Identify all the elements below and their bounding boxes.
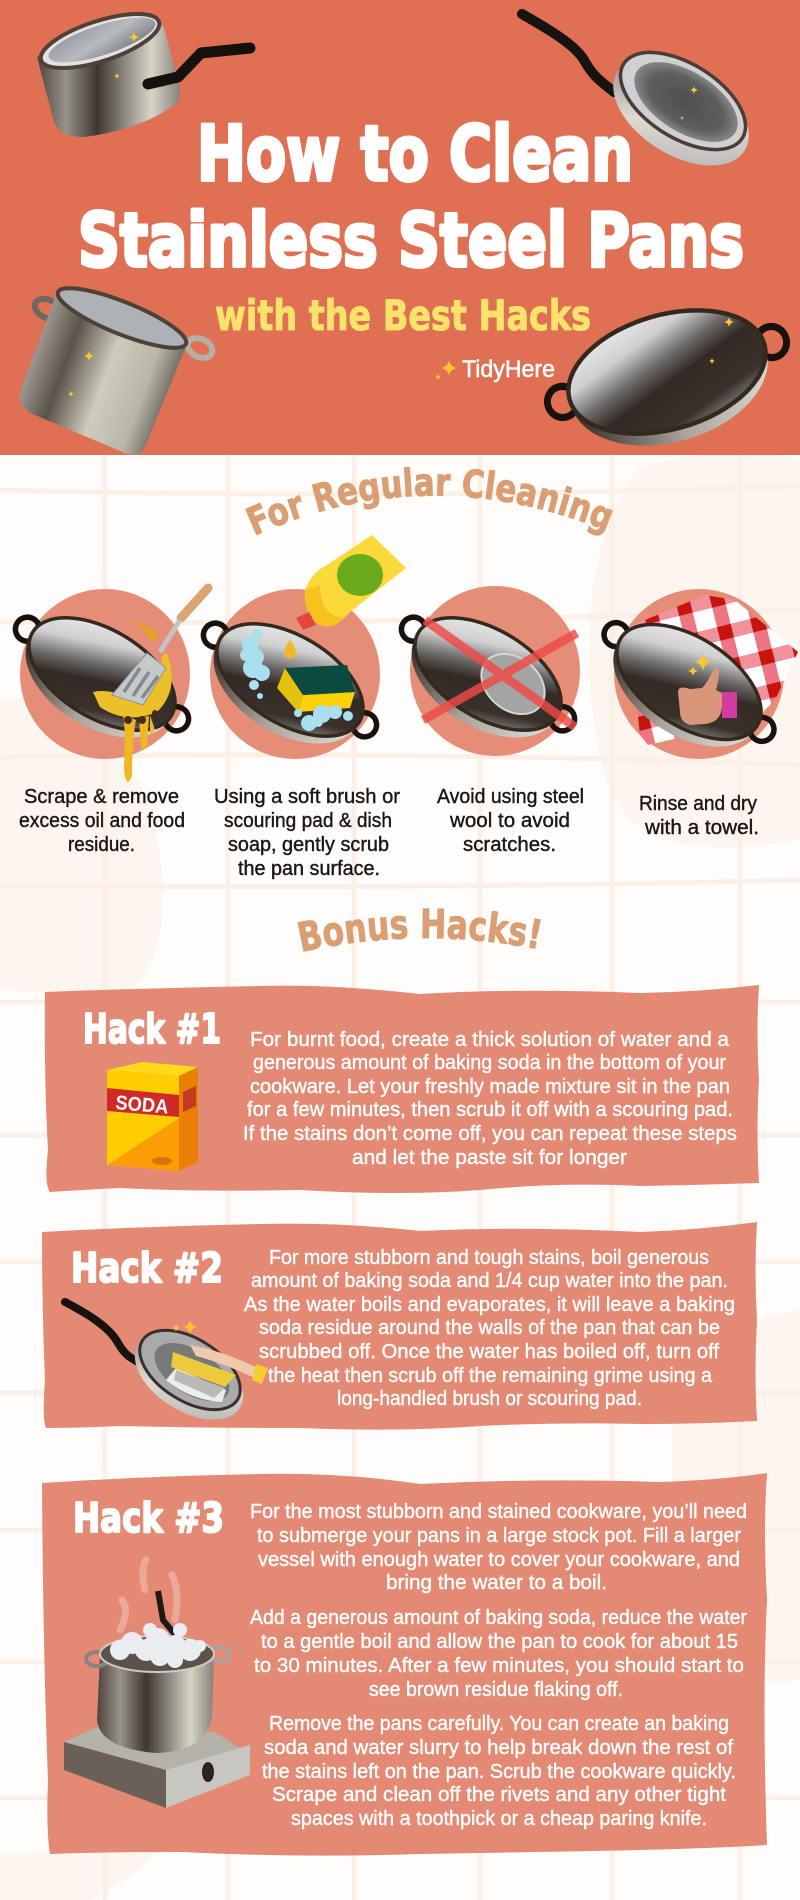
hack 3 text: the stains left on the pan. Scrub the cookware quickly. <box>262 1761 736 1783</box>
hack 1 text: cookware. Let your freshly made mixture sit in the pan <box>250 1076 730 1098</box>
circle <box>210 589 380 759</box>
hack 3 text: spaces with a toothpick or a cheap paring knife. <box>291 1808 707 1830</box>
icon: saucepan top left <box>35 3 250 137</box>
icon: wok with thumbs up <box>577 591 796 781</box>
header banner <box>0 0 800 474</box>
hack 2 text: As the water boils and evaporates, it will leave a baking <box>244 1294 735 1316</box>
hack 2 text <box>244 1247 735 1410</box>
icon: check towel <box>628 595 798 745</box>
step captions <box>19 786 759 880</box>
icon: pan with brush <box>65 1302 268 1437</box>
hack 3 text: For the most stubborn and stained cookware, you’ll need <box>250 1501 747 1523</box>
icon: soda box: SODA <box>115 1092 169 1119</box>
icon: wok with steel wool <box>375 585 596 771</box>
hack 2 text: scrubbed off. Once the water has boiled off, turn off <box>259 1341 719 1363</box>
hack 3 text: to submerge your pans in a large stock pot. Fill a larger <box>257 1525 741 1547</box>
hack 3 text: see brown residue flaking off. <box>369 1679 623 1701</box>
step captions: Using a soft brush or <box>214 786 400 808</box>
hack 1 text <box>243 1029 737 1169</box>
step captions: scouring pad & dish <box>224 810 392 832</box>
hack 2 text: soda residue around the walls of the pan that can be <box>259 1317 720 1339</box>
hack 1 title: Hack #1 <box>83 1005 221 1053</box>
panel: hack 1 <box>45 985 759 1193</box>
step captions: Scrape & remove <box>24 786 179 808</box>
hack 3 text: soda and water slurry to help break down the rest of <box>264 1737 733 1759</box>
step captions: Avoid using steel <box>437 786 584 808</box>
hack 1 text: generous amount of baking soda in the bottom of your <box>253 1052 726 1074</box>
panel: hack 3 <box>42 1473 767 1856</box>
icon: wok with sponge, soap and bubbles <box>177 535 406 777</box>
icon: boiling pot on stove <box>64 1560 250 1808</box>
step 1: scrape <box>0 585 210 782</box>
circle <box>614 589 784 759</box>
hack 1 text: and let the paste sit for longer <box>352 1147 627 1169</box>
panel: hack 2 <box>42 1222 757 1437</box>
title: How to Clean <box>197 109 633 198</box>
hack 1 text: for a few minutes, then scrub it off with a scouring pad. <box>247 1099 733 1121</box>
heading: bonus hacks: Bonus Hacks! <box>298 908 541 952</box>
hack 2 text: amount of baking soda and 1/4 cup water into the pan. <box>251 1270 728 1292</box>
hack 3 text: to a gentle boil and allow the pan to cook for about 15 <box>261 1631 738 1653</box>
step 3: avoid steel wool <box>375 585 596 771</box>
hack 3 text: Remove the pans carefully. You can create an baking <box>269 1713 729 1735</box>
icon: stock pot bottom left <box>20 277 216 455</box>
icon: wok with spatula and oil <box>0 585 210 782</box>
hack 1 text: For burnt food, create a thick solution of water and a <box>250 1029 730 1051</box>
icon: soda box <box>107 1062 198 1171</box>
icon: red cross <box>423 620 577 727</box>
logo: TidyHere <box>462 356 555 383</box>
step captions: Rinse and dry <box>639 793 757 815</box>
icon: frying pan top right <box>522 14 768 188</box>
step 2: scrub <box>177 535 406 777</box>
title <box>78 109 744 284</box>
hack 3 text: Add a generous amount of baking soda, reduce the water <box>250 1607 747 1629</box>
hack 1 text: If the stains don’t come off, you can repeat these steps <box>243 1123 737 1145</box>
hack 3 title: Hack #3 <box>73 1494 224 1542</box>
hack 3 text: to 30 minutes. After a few minutes, you should start to <box>254 1655 744 1677</box>
hack 2 title: Hack #2 <box>71 1244 223 1292</box>
hack 3 text: vessel with enough water to cover your cookware, and <box>258 1549 740 1571</box>
hack 3 text <box>250 1501 747 1830</box>
step captions: excess oil and food <box>19 810 185 832</box>
circle <box>20 589 190 759</box>
step 4: rinse and dry <box>577 589 798 781</box>
step captions: with a towel. <box>644 817 759 839</box>
hack 2 text: the heat then scrub off the remaining grime using a <box>268 1365 713 1387</box>
subtitle: with the Best Hacks <box>215 291 591 340</box>
icon: wok bottom right <box>532 283 800 474</box>
hack 2 text: long-handled brush or scouring pad. <box>337 1388 642 1410</box>
hack 3 text: Scrape and clean off the rivets and any other tight <box>272 1784 726 1806</box>
heading: for regular cleaning: For Regular Cleaning <box>245 466 613 536</box>
step captions: wool to avoid <box>449 810 570 832</box>
hack 3 text: bring the water to a boil. <box>386 1572 607 1594</box>
step captions: scratches. <box>463 834 556 856</box>
step captions: the pan surface. <box>238 858 380 880</box>
hack 2 text: For more stubborn and tough stains, boil generous <box>269 1247 709 1269</box>
circle <box>410 586 580 756</box>
step captions: soap, gently scrub <box>228 834 389 856</box>
step captions: residue. <box>68 834 135 856</box>
